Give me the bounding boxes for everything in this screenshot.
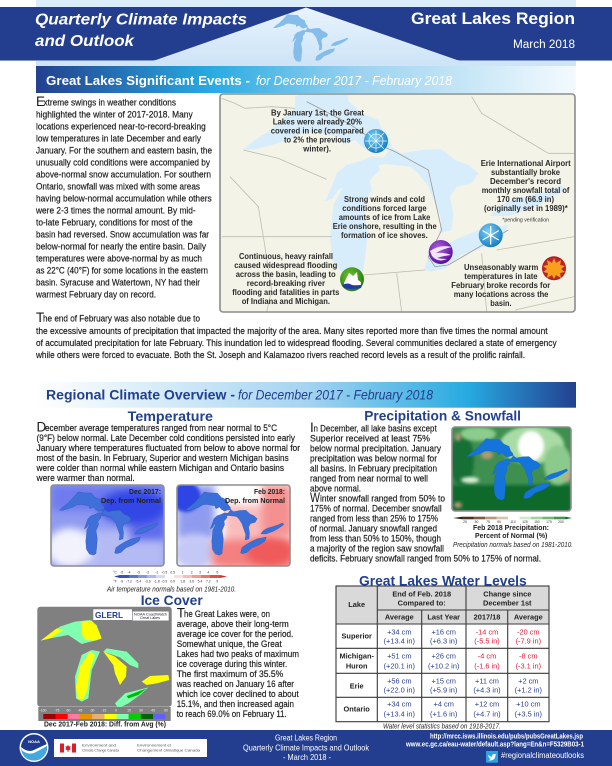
row: Michigan-Huron: +26 cm [431, 651, 456, 660]
text block: precipitation paragraph: T [36, 310, 44, 325]
text block: temperature: January where temperatures fluctuated from below to above normal for [36, 443, 301, 454]
footer title: Great Lakes Region [275, 734, 337, 743]
footer links [405, 731, 584, 763]
caption: precipitation map: Precipitation normals based on 1981-2010. [453, 542, 573, 549]
text block: significant events intro [35, 94, 212, 300]
callout: river flooding: of Indiana and Michigan. [242, 297, 330, 306]
legend: temperature departure scale: 9 [216, 580, 218, 584]
callout: ice shoves: Strong winds and cold [344, 195, 425, 204]
table header: Last Year [427, 613, 460, 622]
footer title: Quarterly Climate Impacts and Outlook [243, 744, 370, 752]
legend: precipitation percent scale: 200 [558, 520, 564, 524]
text block: precipitation and snowfall: ranged from less than 25% to 175% [310, 514, 438, 525]
callout: ice cover by January 1st: covered in ice (compared [271, 127, 364, 136]
text block: significant events intro: above-normal snow accumulation. For southern [36, 170, 211, 180]
text block: ice cover: The first maximum of 35.5% [177, 669, 284, 680]
row: Ontario: (+1.6 in) [430, 709, 457, 718]
text block: precipitation and snowfall: all basins. In February precipitation [310, 464, 437, 475]
text block: temperature: D [36, 420, 46, 434]
footer links: http://mrcc.isws.illinois.edu/pubs/pubsGreatLakes.jsp [430, 731, 584, 740]
row: Superior: (+6.3 in) [430, 636, 457, 645]
text block: temperature: (9°F) below normal. Late December cold conditions persisted into early [36, 433, 295, 444]
row: Michigan-Huron: +51 cm [387, 651, 412, 660]
heading: Ice Cover: Ice Cover [141, 592, 203, 608]
table header: Change since [483, 590, 531, 599]
row: Ontario: (+3.5 in) [515, 709, 542, 718]
footer [0, 730, 612, 766]
text block: ice cover: T [177, 606, 185, 620]
text block: significant events intro: locations experienced near-to-record-breaking [36, 122, 206, 132]
footer links: www.ec.gc.ca/eau-water/default.asp?lang=En&n=F5329B03-1 [405, 740, 584, 749]
callout: Erie International Airport snowfall: (originally set in 1989)* [484, 204, 569, 213]
text block: significant events intro: temperatures were above-normal by as much [36, 254, 202, 264]
legend: ice cover difference scale: -100 [40, 708, 47, 712]
legend: precipitation percent scale: 110 [510, 520, 516, 524]
heading: Precipitation & Snowfall: Precipitation & Snowfall [364, 408, 521, 424]
row: Erie: Erie [350, 681, 364, 690]
text block: ice cover: he Great Lakes were, on [184, 609, 270, 620]
legend: temperature departure scale: -0.9 [161, 580, 167, 584]
text block: precipitation and snowfall: above normal. [310, 484, 361, 495]
caption: ice cover map: Dec 2017-Feb 2018: Diff. from Avg (%) [44, 720, 166, 729]
text block: precipitation and snowfall: W [310, 490, 320, 505]
text block: precipitation and snowfall: a majority of the region saw snowfall [310, 544, 444, 555]
row: Superior: (-5.5 in) [474, 636, 500, 645]
text block: temperature: were colder than normal while eastern Michigan and Ontario basins [36, 463, 284, 474]
callout: river flooding [232, 252, 340, 306]
legend: precipitation percent scale: 125 [522, 520, 528, 524]
icon: NOAA logo: NOAA [28, 739, 40, 744]
legend: ice cover difference scale: -30 [90, 708, 95, 712]
text block: precipitation and snowfall: Superior received at least 75% [310, 434, 430, 445]
row: Superior: (-7.9 in) [516, 636, 541, 645]
text block: ice cover: which ice cover declined to about [176, 689, 299, 700]
text block: significant events intro: warmest February day on record. [35, 290, 156, 300]
text block: precipitation and snowfall: inter snowfall ranged from 50% to [320, 494, 445, 505]
text block: ice cover [176, 606, 299, 720]
header banner [0, 0, 612, 66]
callout: ice cover by January 1st: Lakes were already 20% [273, 118, 362, 127]
text block: significant events intro: having below-normal accumulation while others [36, 194, 212, 204]
row: Superior: Superior [342, 631, 372, 640]
row: Michigan-Huron: -8 cm [519, 651, 538, 660]
legend: ice cover difference scale: 15 [127, 708, 131, 712]
legend: temperature departure scale: 4 [207, 570, 209, 574]
text block: significant events intro: to-late February, conditions for most of the [36, 218, 193, 228]
legend: ice cover difference scale [38, 707, 171, 721]
text block: precipitation and snowfall: ranged from near normal to well [310, 474, 428, 485]
icon: Great Lakes silhouette [273, 14, 348, 62]
legend: temperature departure scale: -4 [127, 570, 131, 574]
legend: ice cover difference scale: -75 [55, 708, 60, 712]
caption: precipitation map: Feb 2018 Precipitation: [473, 523, 549, 532]
map: February 2018 temperature departure [176, 484, 291, 567]
row: Erie: (+4.3 in) [473, 685, 501, 694]
callout: ice shoves: amounts of ice from Lake [339, 213, 431, 222]
text block: significant events intro: Ontario, snowfall was mixed with some areas [36, 182, 200, 192]
legend: temperature departure scale: 7.2 [206, 580, 211, 584]
legend: temperature departure scale: 1 [182, 570, 184, 574]
legend: temperature departure scale: -9 [120, 580, 123, 584]
row: Ontario: +10 cm [516, 699, 541, 708]
legend: temperature departure scale: 5.4 [198, 580, 202, 584]
legend: temperature departure scale: 0.9 [170, 580, 175, 584]
region and date: March 2018 [513, 39, 575, 51]
legend: precipitation percent scale: 175 [546, 520, 552, 524]
text block: precipitation and snowfall: I [310, 420, 314, 435]
text block: precipitation and snowfall: precipitation was below normal for [310, 454, 438, 465]
legend: temperature departure scale: -3 [137, 570, 140, 574]
icon: wind and ice shoves [429, 240, 453, 264]
logo: Environment and Climate Change Canada: Changement climatique Canada [137, 748, 201, 752]
logo: Environment and Climate Change Canada [54, 739, 207, 757]
logos: GLERL and NOAA CoastWatch: NOAA CoastWatch [134, 612, 167, 616]
title: Quarterly Climate Impacts and Outlook: and Outlook [35, 33, 135, 50]
section bar: Regional Climate Overview: Regional Climate Overview - [46, 388, 235, 402]
callout: Erie International Airport snowfall: December's record [490, 177, 561, 186]
logos: GLERL and NOAA CoastWatch: Great Lakes [140, 616, 160, 620]
row: Superior: -14 cm [476, 627, 498, 636]
text block: precipitation and snowfall: of normal. January snowfall ranged [310, 524, 437, 535]
icon: NOAA logo [20, 733, 48, 762]
row: Michigan-Huron: (+10.2 in) [428, 661, 459, 670]
callout: Erie International Airport snowfall: 170 cm (66.9 in) [497, 195, 554, 204]
callout: ice cover by January 1st [271, 109, 364, 154]
row: Michigan-Huron: Michigan- [339, 651, 374, 660]
logos: GLERL and NOAA CoastWatch [93, 609, 169, 620]
callout: ice cover by January 1st: By January 1st, the Great [271, 109, 364, 118]
text block: temperature: most of the basin. In February, Superior and western Michigan basins [36, 453, 289, 464]
row: Superior: +34 cm [387, 627, 412, 636]
logo: Environment and Climate Change Canada: Environment and [82, 742, 116, 748]
text block: temperature [36, 420, 301, 484]
legend: precipitation percent scale: 90 [497, 520, 501, 524]
table: water levels [336, 586, 549, 722]
row: Michigan-Huron: (+20.1 in) [384, 661, 415, 670]
section bar: Regional Climate Overview: for December 2017 - February 2018 [238, 388, 433, 402]
icon: Twitter [486, 751, 498, 763]
text block: ice cover: ice coverage during this winter. [177, 659, 287, 670]
table header: Average [385, 613, 414, 622]
callout: ice cover by January 1st: winter). [302, 145, 331, 154]
table header: End of Feb. 2018 [392, 590, 451, 599]
callout: ice shoves: conditions forced large [342, 204, 427, 213]
logo: Environment and Climate Change Canada: Climate Change Canada [82, 748, 120, 752]
row: Ontario: +12 cm [475, 699, 499, 708]
legend: temperature departure scale [113, 570, 227, 584]
caption: water level statistics: Water level statistics based on 1918-2017. [383, 723, 501, 730]
callout: unseasonably warm temperatures: February broke records for [451, 281, 550, 290]
text block: precipitation paragraph [35, 310, 557, 361]
row: Michigan-Huron: (-3.1 in) [516, 661, 541, 670]
legend: ice cover difference scale: -60 [66, 708, 71, 712]
legend: temperature departure scale: 2 [191, 570, 193, 574]
legend: ice cover difference scale: -15 [102, 708, 107, 712]
callout: ice shoves: Erie onshore, resulting in the [333, 222, 437, 231]
legend: temperature departure scale: 3.6 [189, 580, 194, 584]
text block: significant events intro: basin. Syracuse and Watertown, NY had their [36, 278, 201, 288]
callout: river flooding: flooding and fatalities in parts [232, 288, 340, 297]
row: Erie: (+5.9 in) [430, 685, 457, 694]
text block: precipitation and snowfall: from less than 50% to 150%, though [310, 534, 441, 545]
callout: river flooding: record-breaking river [247, 279, 325, 288]
callout: ice shoves: formation of ice shoves. [341, 231, 428, 240]
legend: ice cover difference scale: 50 [164, 708, 168, 712]
row: Erie: +11 cm [475, 676, 499, 685]
section bar: Regional Climate Overview [36, 382, 576, 408]
callout: Erie International Airport snowfall: substantially broke [491, 168, 561, 177]
legend: temperature departure scale: -2 [146, 570, 149, 574]
legend: temperature departure scale: -5 [120, 570, 123, 574]
row: Erie [350, 676, 542, 694]
legend: temperature departure scale: 5 [216, 570, 218, 574]
row: Michigan-Huron [339, 651, 541, 670]
row: Michigan-Huron: Huron [346, 661, 368, 670]
callout: Erie International Airport snowfall: monthly snowfall total of [482, 186, 570, 195]
footer links: #regionalclimateoutlooks [501, 751, 584, 760]
row: Michigan-Huron: -4 cm [478, 651, 496, 660]
title: Quarterly Climate Impacts and Outlook: Quarterly Climate Impacts [35, 12, 247, 28]
map: December 2017 temperature departure: Dec 2017: [129, 487, 161, 496]
row: Erie: (+1.2 in) [515, 685, 542, 694]
table header: 2017/18 [474, 613, 500, 622]
text block: temperature: were warmer than normal. [36, 473, 135, 484]
row: Ontario: (+4.7 in) [473, 709, 501, 718]
legend: temperature departure scale: -1 [155, 570, 158, 574]
text block: significant events intro: E [36, 94, 45, 109]
table header: December 1st [483, 599, 532, 608]
legend: temperature departure scale: 3 [199, 570, 201, 574]
text block: significant events intro: low temperatures in late December and early [36, 134, 201, 144]
row: Erie: +56 cm [387, 676, 412, 685]
text block: significant events intro: unusually cold conditions were accompanied by [36, 158, 210, 168]
legend: temperature departure scale: 1.8 [180, 580, 185, 584]
text block: precipitation and snowfall: 175% of normal. December snowfall [310, 504, 442, 515]
legend: temperature departure scale: -0.5 [161, 570, 167, 574]
row: Ontario: (+13.4 in) [384, 709, 415, 718]
map: February 2018 temperature departure: Feb 2018: [254, 487, 285, 496]
text block: ice cover: Somewhat unique, the Great [177, 639, 282, 650]
legend: temperature departure scale: -7.2 [126, 580, 132, 584]
row: Superior [342, 627, 541, 645]
row: Ontario: Ontario [344, 704, 370, 713]
table header [348, 590, 543, 622]
map: February 2018 temperature departure: Dep. from Normal [225, 496, 285, 505]
callout: river flooding: Continuous, heavy rainfall [239, 252, 333, 261]
table header: Compared to: [398, 599, 446, 608]
row: Erie: +15 cm [431, 676, 456, 685]
legend: ice cover difference scale: -45 [78, 708, 83, 712]
legend: precipitation percent scale: 150 [534, 520, 540, 524]
legend: temperature departure scale: -3.6 [145, 580, 151, 584]
text block: significant events intro: January. For the southern and eastern basin, the [36, 146, 212, 156]
section bar: Great Lakes Significant Events [36, 66, 576, 93]
footer title [243, 734, 370, 762]
row: Michigan-Huron: (-1.6 in) [474, 661, 500, 670]
callout: unseasonably warm temperatures: temperatures in late [464, 272, 538, 281]
icon: flooding [340, 267, 364, 291]
text block: temperature: ecember average temperatures ranged from near normal to 5°C [45, 423, 277, 434]
heading: Great Lakes Water Levels: Great Lakes Water Levels [359, 573, 527, 589]
text block: significant events intro: basin had reversed. Snow accumulation was far [36, 230, 210, 240]
text block: precipitation paragraph: the excessive amounts of precipitation that impacted the majority of the area. Many sites reported more than five times the normal amount [36, 326, 548, 337]
callout: Erie International Airport snowfall: Erie International Airport [481, 159, 571, 168]
text block: precipitation and snowfall [310, 420, 541, 565]
section bar: Great Lakes Significant Events: for December 2017 - February 2018 [256, 73, 453, 88]
callout: ice cover by January 1st: to 2% the previous [284, 136, 351, 145]
caption: air temperature normals: Air temperature normals based on 1981-2010. [106, 587, 236, 594]
map: ice cover difference from average [37, 607, 172, 721]
table header: Lake [348, 600, 365, 609]
text block: precipitation paragraph: he end of February was also notable due to [43, 314, 200, 325]
icon: warm sun [542, 256, 566, 280]
legend: temperature departure scale: -5.4 [135, 580, 141, 584]
text block: precipitation and snowfall: deficits. February snowfall ranged from 50% to 175% of normal. [310, 554, 541, 565]
panel: significant events map [220, 94, 575, 312]
text block: significant events intro: xtreme swings in weather conditions [44, 98, 176, 108]
legend: precipitation percent scale: 25 [463, 520, 467, 524]
row: Ontario [344, 699, 542, 718]
heading: Temperature: Temperature [128, 408, 213, 424]
row: Erie: (+22.0 in) [384, 685, 415, 694]
legend: temperature departure scale: -1.8 [154, 580, 160, 584]
legend: ice cover difference scale: 0 [115, 708, 117, 712]
callout: Erie International Airport snowfall [481, 159, 571, 224]
legend: temperature departure scale: 0.5 [170, 570, 175, 574]
text block: ice cover: Lakes had two peaks of maximum [177, 649, 299, 660]
callout: unseasonably warm temperatures: Unseasonably warm [464, 263, 538, 272]
callout: ice shoves [333, 195, 437, 240]
callout: river flooding: across the basin, leading to [236, 270, 336, 279]
legend: ice cover difference scale: 45 [151, 708, 155, 712]
text block: precipitation and snowfall: n December, all lake basins except [314, 424, 437, 435]
row: Superior: +16 cm [431, 627, 456, 636]
callout: Erie International Airport snowfall: *pending verification [502, 218, 549, 224]
title: Quarterly Climate Impacts and Outlook [35, 12, 247, 50]
callout: unseasonably warm temperatures [451, 263, 550, 308]
legend: precipitation percent scale: 50 [475, 520, 478, 524]
logos: GLERL and NOAA CoastWatch: GLERL [95, 610, 123, 620]
icon: snowflake [479, 223, 503, 247]
caption: precipitation map: Percent of Normal (%) [475, 531, 548, 540]
text block: significant events intro: below-normal for nearly the entire basin. Daily [36, 242, 206, 252]
text block: significant events intro: were 2-3 times the normal amount. By mid- [35, 206, 196, 216]
text block: precipitation and snowfall: below normal precipitation. January [310, 444, 441, 455]
text block: ice cover: to reach 69.0% on February 11. [177, 709, 287, 720]
legend: precipitation percent scale [453, 517, 572, 524]
map: December 2017 temperature departure [46, 485, 167, 570]
map: December 2017 temperature departure: Dep. from Normal [101, 496, 161, 505]
legend: temperature departure scale: °F [113, 580, 117, 584]
region and date: Great Lakes Region [411, 10, 575, 28]
row: Ontario: +34 cm [387, 699, 412, 708]
legend: precipitation percent scale: 75 [486, 520, 490, 524]
text block: significant events intro: as 22°C (40°F) for some locations in the eastern [36, 266, 208, 276]
icon: ice [364, 129, 388, 153]
text block: significant events intro: highlighted the winter of 2017-2018. Many [36, 110, 193, 120]
text block: ice cover: average ice cover for the period. [177, 629, 293, 640]
text block: ice cover: was reached on January 16 after [176, 679, 295, 690]
text block: ice cover: average, above their long-term [177, 619, 289, 630]
caption: precipitation map [453, 523, 573, 549]
callout: unseasonably warm temperatures: basin. [490, 299, 512, 308]
row: Ontario: +4 cm [434, 699, 454, 708]
row: Erie: +2 cm [518, 676, 538, 685]
section bar: Great Lakes Significant Events: Great Lakes Significant Events - [46, 73, 250, 88]
region and date [411, 10, 575, 51]
table header: Average [514, 613, 543, 622]
legend: temperature departure scale: °C [113, 570, 117, 574]
text block: ice cover: 15.1%, and then increased again [177, 699, 294, 710]
callout: unseasonably warm temperatures: many locations across the [454, 290, 549, 299]
map: February 2018 precipitation percent of normal [450, 426, 572, 512]
row: Superior: (+13.4 in) [384, 636, 415, 645]
footer title: - March 2018 - [283, 753, 331, 762]
logo: Environment and Climate Change Canada: Environnement et [137, 742, 172, 748]
legend: ice cover difference scale: 30 [139, 708, 143, 712]
row: Superior: -20 cm [517, 627, 540, 636]
text block: precipitation paragraph: while others were forced to evacuate. Both the St. Joseph and Kalamazoo rivers reached record levels as a result of the prolific rainfall. [35, 350, 525, 361]
callout: river flooding: caused widespread flooding [234, 261, 338, 270]
